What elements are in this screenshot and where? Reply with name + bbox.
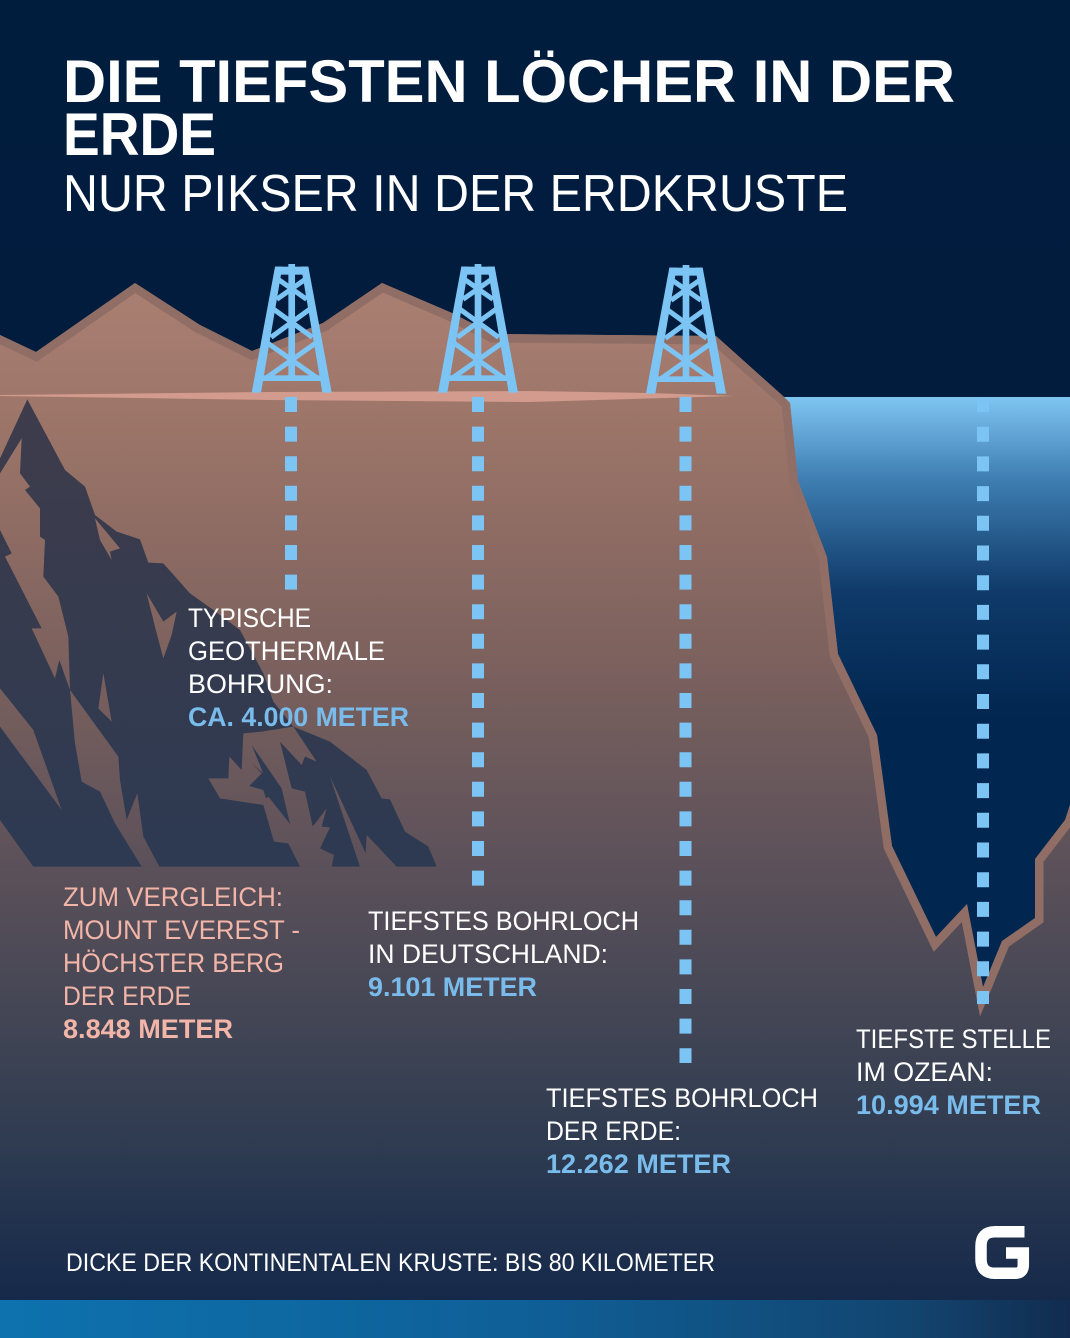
label: deepest borehole on earth: TIEFSTES BOHRLOCH [546,1083,818,1113]
bottom colour bar [0,1300,1070,1338]
drill line: world deepest [680,397,692,1063]
footnote: crust thickness: DICKE DER KONTINENTALEN KRUSTE: BIS 80 KILOMETER [66,1249,715,1277]
label: Mount Everest comparison [63,882,300,1044]
label: deepest borehole in Germany: 9.101 METER [368,972,537,1002]
subtitle: NUR PIKSER IN DER ERDKRUSTE [63,165,848,223]
label: Mount Everest comparison: HÖCHSTER BERG [63,948,284,978]
label: deepest borehole on earth: DER ERDE: [546,1116,681,1146]
label: deepest borehole on earth: 12.262 METER [546,1149,731,1179]
title: ERDE [63,101,216,168]
label: geothermal drilling: BOHRUNG: [188,669,333,699]
ocean water [780,397,1070,1037]
label: deepest borehole in Germany: IN DEUTSCHLAND: [368,939,608,969]
drill line: Germany [472,397,484,887]
label: geothermal drilling: TYPISCHE [188,603,311,633]
label: deepest borehole in Germany: TIEFSTES BOHRLOCH [368,906,639,936]
label: deepest point in ocean: IM OZEAN: [856,1057,993,1087]
label: geothermal drilling [188,603,409,732]
label: deepest point in ocean: TIEFSTE STELLE [856,1024,1051,1054]
surface line [0,391,735,402]
icon: drilling rig 3 [646,265,726,394]
icon: drilling rig 2 [438,264,518,393]
label: deepest borehole on earth [546,1083,818,1179]
label: deepest point in ocean [856,1024,1051,1120]
label: Mount Everest comparison: 8.848 METER [63,1014,233,1044]
label: deepest point in ocean: 10.994 METER [856,1090,1041,1120]
label: Mount Everest comparison: ZUM VERGLEICH: [63,882,283,912]
label: geothermal drilling: GEOTHERMALE [188,636,385,666]
label: deepest borehole in Germany [368,906,639,1002]
label: geothermal drilling: CA. 4.000 METER [188,702,409,732]
ocean depth line [977,397,989,1004]
earth crust cross-section [0,283,1070,1300]
background sky [0,0,1070,400]
title [63,48,955,168]
icon: drilling rig 1 [252,264,332,393]
label: Mount Everest comparison: DER ERDE [63,981,191,1011]
drill line: geothermal [285,397,297,590]
title: DIE TIEFSTEN LÖCHER IN DER [63,48,955,115]
label: Mount Everest comparison: MOUNT EVEREST - [63,915,300,945]
mount everest silhouette [0,399,437,867]
icon: G logo [981,1232,1024,1273]
